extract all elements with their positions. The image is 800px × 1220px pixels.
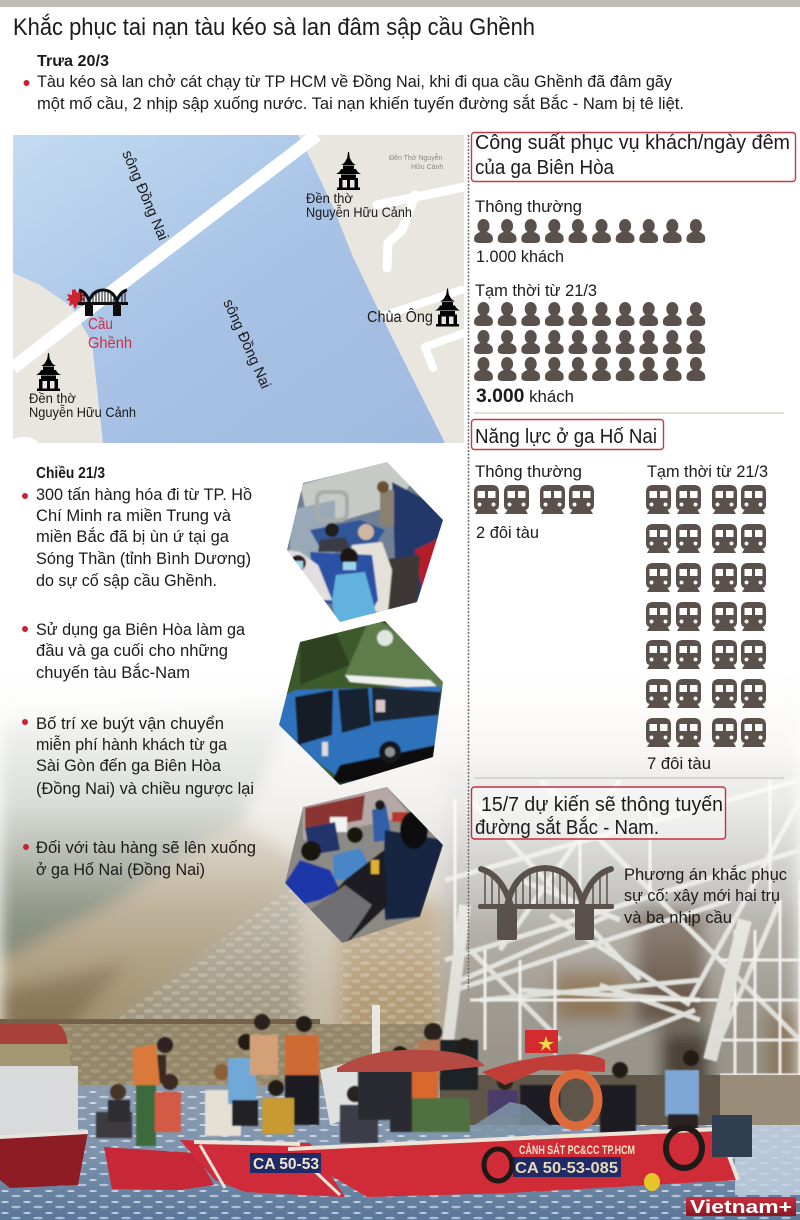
icons: 7 train pairs <box>646 485 766 747</box>
main red boat: CA 50-53-085 <box>515 1160 618 1177</box>
bullet 4: Đối với tàu hàng sẽ lên xuống <box>36 839 256 857</box>
title: Khắc phục tai nạn tàu kéo sà lan đâm sập cầu Ghềnh <box>13 14 535 41</box>
main red boat <box>194 1115 752 1197</box>
heading box <box>472 131 796 182</box>
heading box: Năng lực ở ga Hố Nai <box>475 425 657 448</box>
top bar <box>0 0 800 7</box>
icon: pagoda lower left <box>36 353 61 391</box>
red boat 2 <box>104 1147 214 1190</box>
label: temple lower: Nguyễn Hữu Cảnh <box>29 404 136 420</box>
bullet 2 <box>22 621 246 682</box>
intro text block: Trưa 20/3 <box>24 53 684 113</box>
river label upper: sông Đồng Nai <box>118 148 171 243</box>
intro text block: Trưa 20/3: Tàu kéo sà lan chở cát chạy từ TP HCM về Đồng Nai, khi đi qua cầu Ghềnh đã đâm gãy <box>37 72 672 91</box>
bullet 1: Chí Minh ra miền Trung và <box>36 507 232 525</box>
canopies and life ring <box>337 1050 605 1140</box>
icon: accident burst <box>66 289 86 309</box>
red boat 3 <box>180 1140 345 1197</box>
label: temple lower <box>29 390 136 420</box>
crew silhouettes <box>96 1014 699 1146</box>
icon: pagoda right <box>435 288 460 326</box>
icons: 2 train pairs <box>474 485 594 514</box>
bullet 1: miền Bắc đã bị ùn ứ tại ga <box>36 527 230 546</box>
label: temple upper: Đền thờ <box>306 190 353 206</box>
bullet 2: đầu và ga cuối cho những <box>36 642 228 660</box>
label: Cầu Ghềnh: Ghềnh <box>88 335 132 352</box>
dotted column divider <box>468 135 470 990</box>
text: repair plan: sự cố: xây mới hai trụ <box>624 886 780 905</box>
bullet 3: Sài Gòn đến ga Biên Hòa <box>36 757 222 775</box>
label: normal: Thông thường <box>475 462 582 481</box>
text: repair plan: Phương án khắc phục <box>624 865 787 884</box>
hexagon photo: blue shuttle bus <box>275 618 447 788</box>
subheading: Chiều 21/3 <box>36 465 105 482</box>
map label: printed temple name: Đền Thờ Nguyễn <box>389 153 443 162</box>
label: Cầu Ghềnh <box>88 316 132 352</box>
hexagon photo: passengers on bus <box>287 462 443 622</box>
label: temple lower: Đền thờ <box>29 390 76 406</box>
bullet 3 <box>22 715 254 798</box>
label: Chùa Ông: Chùa Ông <box>367 309 433 326</box>
callout: reopening date: đường sắt Bắc - Nam. <box>475 816 659 839</box>
bullet 2: chuyến tàu Bắc-Nam <box>36 663 190 682</box>
bottom photo: rescue boats on the river <box>0 1005 800 1220</box>
white haze fade over the photo <box>0 540 800 1050</box>
bullet 2: Sử dụng ga Biên Hòa làm ga <box>36 621 246 639</box>
hexagon photo: ticket counter <box>280 785 448 945</box>
bullet 3: miễn phí hành khách từ ga <box>36 735 228 754</box>
text: repair plan <box>624 865 787 927</box>
value: 7 đôi tàu: 7 đôi tàu <box>647 755 711 773</box>
main red boat: CẢNH SÁT PC&CC TP.HCM <box>519 1144 635 1157</box>
bullet 4 <box>23 839 256 879</box>
icon: bridge <box>478 868 614 940</box>
bullet 1: do sự cố sập cầu Ghềnh. <box>36 572 217 590</box>
icon: pagoda upper <box>336 152 361 190</box>
value: 3.000 khách: 3.000 khách <box>476 386 574 407</box>
bullet 4: ở ga Hố Nai (Đồng Nai) <box>36 861 205 879</box>
icons: 10 people row <box>474 219 705 243</box>
flag <box>525 1030 558 1053</box>
left column: Chiều 21/3 bullet list <box>22 465 256 879</box>
intro text block: Trưa 20/3: Trưa 20/3 <box>37 53 109 70</box>
bullet 3: (Đồng Nai) và chiều ngược lại <box>36 780 254 798</box>
heading box: của ga Biên Hòa <box>475 156 615 179</box>
panel: Hố Nai station capacity <box>472 420 768 773</box>
bullet 1 <box>22 486 252 590</box>
background photo: collapsed bridge in haze <box>0 680 800 1110</box>
label: temple upper: Nguyễn Hữu Cảnh <box>306 204 412 220</box>
river label lower: sông Đồng Nai <box>219 297 274 391</box>
value: 1.000 khách: 1.000 khách <box>476 248 564 266</box>
left moored boat <box>0 1024 88 1188</box>
wall and water backdrop <box>0 1005 800 1220</box>
panel: Biên Hòa station capacity <box>472 131 796 407</box>
main red boat: CA 50-53 <box>253 1156 319 1173</box>
text: repair plan: và ba nhịp cầu <box>624 908 732 927</box>
callout: reopening date: 15/7 dự kiến sẽ thông tuyến <box>481 793 723 816</box>
label: temporary: Tạm thời từ 21/3 <box>647 462 768 481</box>
callout: reopening date <box>472 787 726 839</box>
label: Cầu Ghềnh: Cầu <box>88 316 113 333</box>
heading box: Công suất phục vụ khách/ngày đêm <box>475 131 790 154</box>
Vietnam+ logo: Vietnam+ <box>690 1196 792 1217</box>
map of the accident site <box>9 135 464 453</box>
label: normal: Thông thường <box>475 197 582 216</box>
bullet 1: 300 tấn hàng hóa đi từ TP. Hồ <box>36 486 252 504</box>
icons: 30 people rows <box>474 302 705 381</box>
label: temple upper <box>306 190 412 220</box>
bullet 1: Sóng Thần (tỉnh Bình Dương) <box>36 550 251 568</box>
icon: bridge marker <box>78 290 128 316</box>
bullet 3: Bố trí xe buýt vận chuyển <box>36 715 224 733</box>
map label: printed temple name: Hữu Cảnh <box>411 164 443 171</box>
value: 2 đôi tàu: 2 đôi tàu <box>476 524 539 542</box>
label: temporary: Tạm thời từ 21/3 <box>475 281 597 300</box>
intro text block: Trưa 20/3: một mố cầu, 2 nhịp sập xuống nước. Tai nạn khiến tuyến đường sắt Bắc - Nam bị tê liệt. <box>37 94 684 113</box>
